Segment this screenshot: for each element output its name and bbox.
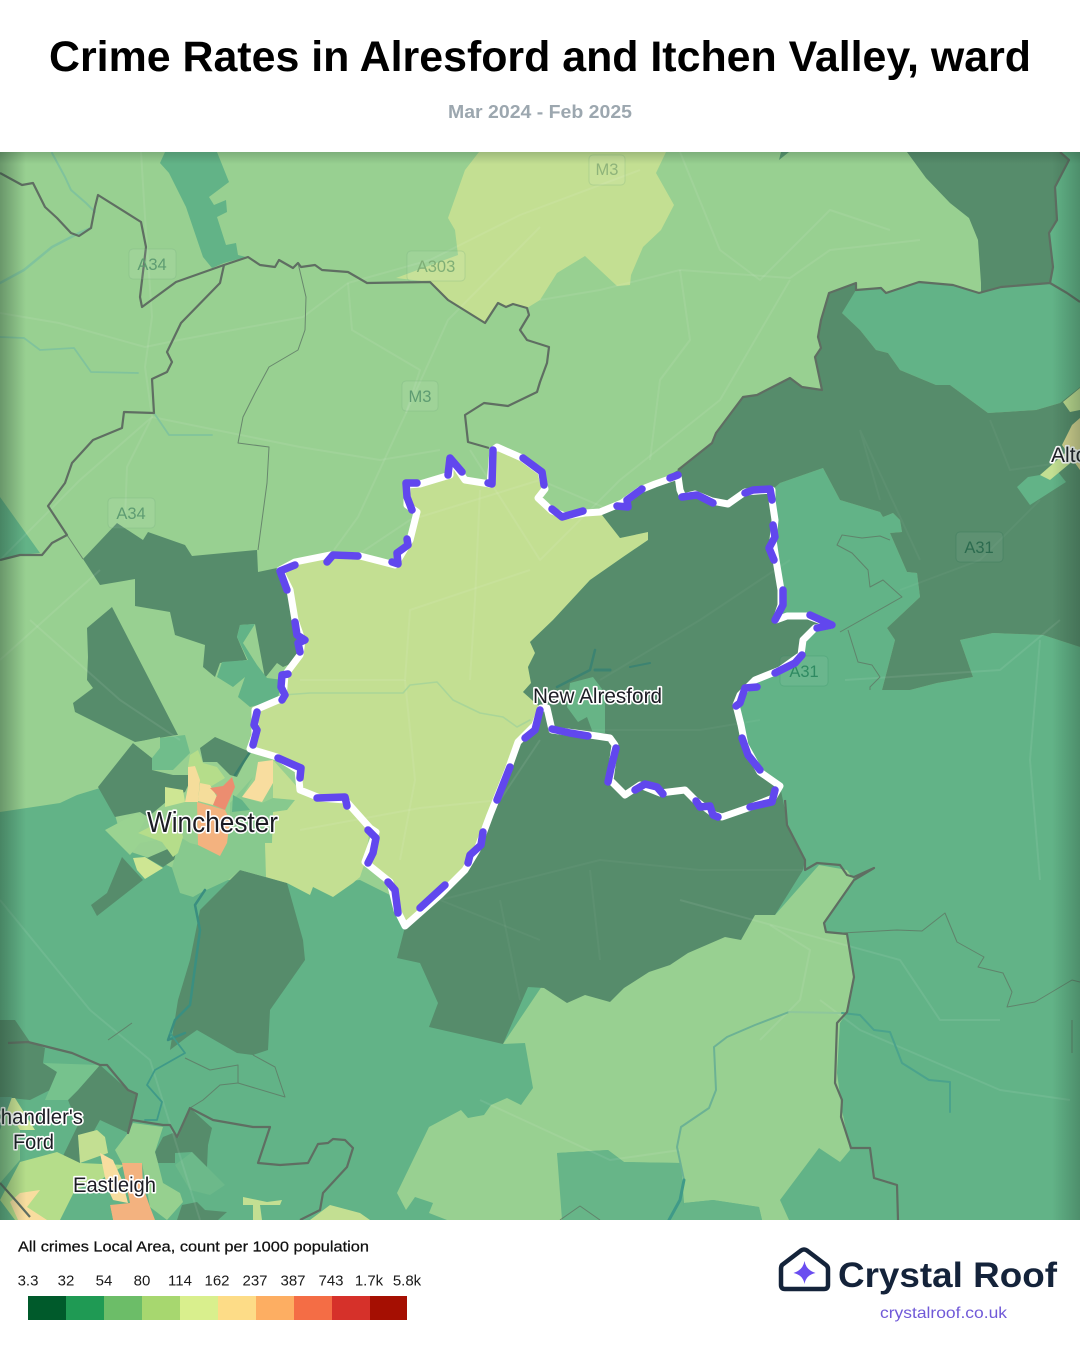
website: crystalroof.co.uk: [880, 1305, 1008, 1322]
west dark areas: [0, 523, 305, 1220]
Alton town fragment: [1017, 388, 1080, 505]
legend colour scale: [28, 1296, 407, 1320]
label: M3 north: [589, 155, 625, 185]
base area: light green: [0, 152, 1080, 1220]
administrative boundaries: [0, 152, 1080, 1220]
place labels: [0, 444, 1080, 1197]
ward: Itchen Valley side fill: [250, 450, 648, 926]
Eastleigh and Chandler's Ford areas: [0, 1063, 370, 1220]
legend values: 5.8k: [393, 1272, 422, 1290]
legend values: 80: [134, 1272, 150, 1290]
label: A34 south: A34: [116, 505, 146, 523]
Winchester neighbourhood areas: [105, 624, 370, 897]
legend values: 387: [280, 1272, 306, 1290]
label: A34 north: [129, 249, 176, 279]
place: Winchester: Winchester: [147, 807, 278, 839]
legend: [18, 1238, 422, 1320]
legend values: [18, 1272, 422, 1290]
label: M3 centre: M3: [409, 388, 431, 406]
legend title: All crimes Local Area, count per 1000 population: [18, 1238, 369, 1256]
label: A31 east: [956, 532, 1003, 562]
place: New Alresford: New Alresford: [533, 685, 662, 708]
roads: [0, 152, 1070, 1220]
label: A31 west: A31: [789, 663, 819, 681]
choropleth map: [0, 152, 1080, 1220]
header: [49, 33, 1031, 122]
legend values: 32: [58, 1272, 74, 1290]
place: Ford: Ford: [13, 1131, 54, 1154]
title: Crime Rates in Alresford and Itchen Valley, ward: [49, 33, 1031, 81]
map edge shading: [0, 152, 1080, 1220]
label: A34 south: [108, 498, 155, 528]
legend values: 743: [318, 1272, 344, 1290]
label: A34 north: A34: [137, 256, 167, 274]
footer: [18, 1238, 1058, 1322]
wordmark: Crystal Roof: [838, 1256, 1057, 1295]
New Alresford town area: [567, 677, 605, 733]
ward boundary: white line: [250, 447, 832, 926]
legend values: 237: [242, 1272, 268, 1290]
logo: Crystal Roof: [781, 1250, 1057, 1322]
label: M3 north: M3: [596, 161, 618, 179]
ward: Alresford side dark fill: [397, 283, 1080, 1044]
ward boundary: purple dashes: [253, 450, 832, 913]
area fills: [0, 152, 1080, 1220]
label: A31 west: [780, 656, 828, 686]
label: A31 east: A31: [964, 539, 994, 557]
label: M3 centre: [402, 381, 438, 411]
thin parish lines: [67, 263, 1080, 1220]
label: A303: [407, 251, 465, 281]
rivers: [0, 153, 950, 1220]
label: A303: A303: [417, 258, 455, 276]
legend values: 54: [96, 1272, 112, 1290]
place: Eastleigh: Eastleigh: [73, 1174, 156, 1197]
road labels: [108, 155, 1003, 686]
icon: house with star: [781, 1250, 828, 1289]
legend values: 3.3: [18, 1272, 38, 1290]
legend values: 114: [168, 1272, 192, 1290]
subtitle: date range: Mar 2024 - Feb 2025: [448, 102, 632, 122]
legend values: 1.7k: [355, 1272, 384, 1290]
legend values: 162: [204, 1272, 230, 1290]
